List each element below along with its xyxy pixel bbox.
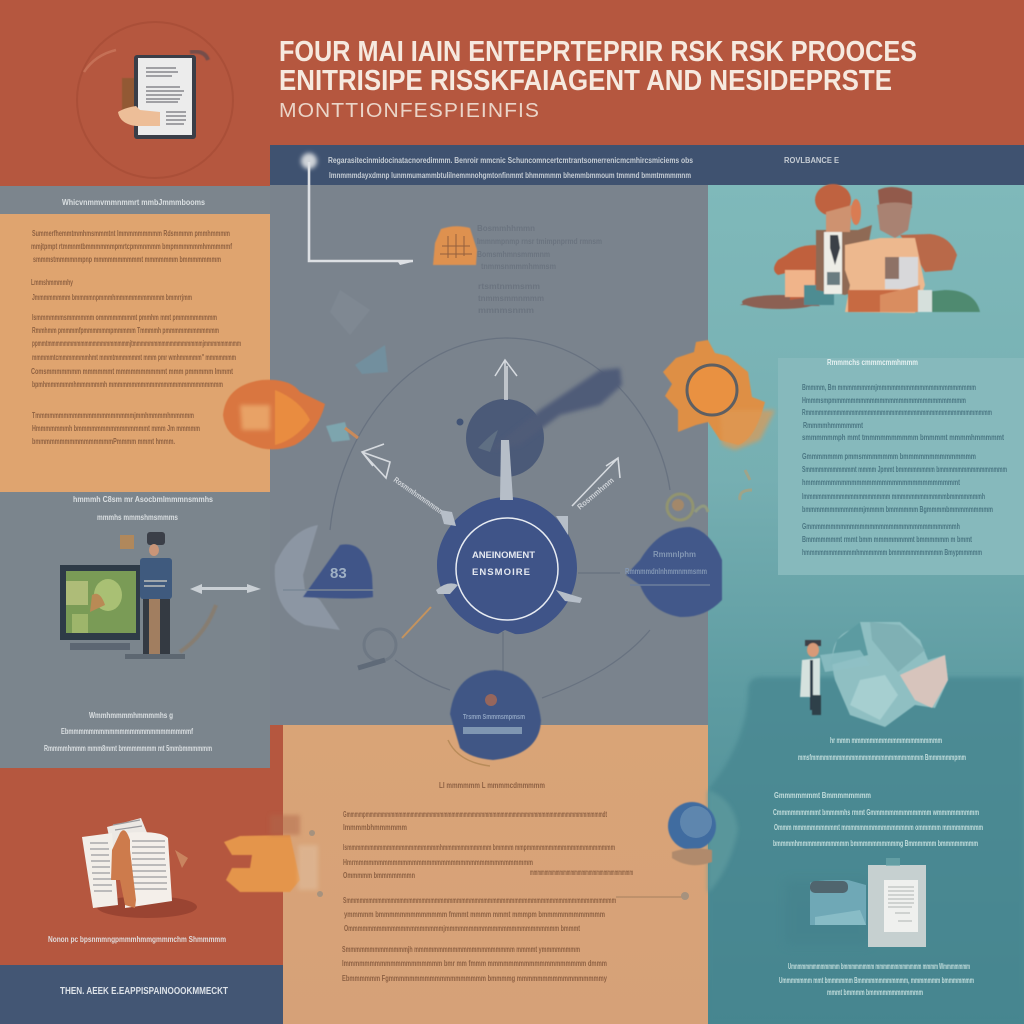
orbit lines — [330, 338, 670, 698]
icon: orange sphere blob — [223, 380, 325, 449]
text block: teal bottom captions — [779, 962, 974, 997]
panel: grey central diagram area — [270, 185, 708, 726]
faint icons around the orbit — [326, 290, 388, 442]
node: right circle: Rmmmmdnlnhmmnmmsmm — [625, 567, 707, 576]
icon: document and scanner — [785, 858, 926, 947]
text block: left orange panel: mmmmmtcmmmmmmmhmt mmmtmmmmmmt mmm pmr wmhmmmmm" mmmmmmm — [32, 353, 236, 362]
icon: orange hand reaching — [224, 815, 318, 892]
icon: gear — [663, 340, 775, 500]
arrow: right diagonal with label — [572, 458, 620, 512]
title: ENITRISIPE RISSKFAIAGENT AND NESIDEPRSTE — [279, 65, 892, 97]
text block: teal bottom captions: mmmt bmmmm bmmmmmmmmmmmm — [827, 988, 923, 997]
decorative connector with dot — [309, 830, 689, 900]
panel: orange lower-center block — [283, 725, 708, 1024]
navy band text: Regarasitecinmidocinatacnoredimmm. Benroir mmcnic Schuncomncertcmtrantsomerrenicmcmhircsmiciems obs — [328, 156, 693, 165]
text block: left grey top: mmmhs mmmshmsmmms — [97, 513, 178, 522]
text block: light teal panel: Rmmmchs cmmmcmmhmmm — [827, 358, 918, 367]
text block: lower orange panel: Smmmmmmmmmmmmmmmmmmmmmmmmmmmmmmmmmmmmmmmmmmmmmmmmmmmmmmmmmmmmm — [343, 896, 616, 905]
text block: left grey bottom: Wmmhmmmmhmmmmhs g — [89, 711, 173, 720]
panel: navy footer — [0, 965, 283, 1024]
node: left half-dome — [275, 525, 374, 630]
text block: left orange panel: bpmhmmmmmmhmmmmmmh mmmmmmmmmmmmmmmmmmmmmmmmm — [32, 380, 223, 389]
text block: centre top: Bosmmhhmmn — [477, 224, 535, 233]
icon: hand holding tablet — [77, 22, 233, 178]
node: centre circle: ANEINOMENT — [472, 550, 535, 561]
node: bottom circle — [448, 670, 541, 766]
text block: left orange panel: smmmstmmmmnmpnp mmmmmmmmmmt mmmmmmm bmmmmmmmm — [33, 255, 221, 264]
text block: left orange panel: Whicvnmmvmmnmmrt mmbJmmmbooms — [62, 198, 205, 207]
icon: arrow bulb L connector — [301, 153, 413, 265]
text block: centre top: tnmmsnmmmhmmsm — [481, 262, 556, 271]
text block: left grey bottom — [44, 711, 212, 753]
text block: centre top: Bomsmhmnsmmmnm — [477, 250, 550, 259]
text block: centre top — [477, 224, 602, 315]
icon: blue dial — [668, 790, 738, 893]
text block: left orange panel: Tmmmmmmmmmmmmmmmmmmmmmjmmhmmmmhmmmmm — [32, 411, 194, 420]
text block: lower orange panel: Gmmmmpmmmmmmmmmmmmmmmmmmmmmmmmmmmmmmmmmmmmmmmmmmmmmmmmmmmmmmmmmmdt — [343, 810, 607, 819]
title — [279, 36, 917, 97]
icon: business people — [740, 184, 980, 313]
navy band text — [328, 156, 840, 180]
text block: centre top: Immnmpnmp rnsr tmimpnprmd rmnsm — [477, 237, 602, 246]
text block: lower orange panel: Ommmmmmmmmmmmmmmmmmmmjmmmmmmmmmmmmmmmmmmmmmmmm bmmmt — [344, 924, 580, 933]
subtitle: MONTTIONFESPIEINFIS — [279, 100, 540, 122]
arrow: double horizontal — [180, 584, 261, 652]
text block: left grey top: hmmmh C8sm mr Asocbmlmmmnsmmhs — [73, 495, 213, 504]
node: left half-dome: 83 — [330, 565, 347, 582]
arrow: left diagonal with label: Rosmmhmmmmmm — [392, 475, 446, 517]
text block: left orange panel: Comsmmmmmmm mmmmmmt mmmmmmmmmmt mmm pmmmmm lmmmt — [31, 367, 233, 376]
text block: left orange panel: Lmmshmmmmhy — [31, 278, 73, 287]
text block: light teal panel — [802, 358, 1007, 557]
text block: left grey top — [73, 495, 213, 522]
node: right circle: Rmmnlphm — [653, 550, 696, 559]
text block: left orange panel: bmmmmmmmmmmmmmmmmPmmmm mmmt hmmm. — [32, 437, 175, 446]
text block: centre top: tnmmsmmnmmm — [478, 294, 544, 303]
arrow: up — [495, 360, 517, 400]
panel: light teal text block — [778, 358, 1024, 575]
text block: left grey bottom: Rmmmmhmmm mmm8mmt bmmmmmmm mt 5mmbmmmmmm — [44, 744, 212, 753]
panel: red lower-left block — [0, 768, 283, 965]
text block: left orange panel: ppmmtmmmmmmmmmmmmmmmmmmmmjtmmmmmmmmmmmmmmmmmjmmmmmmmmm — [32, 339, 241, 348]
text block: centre top: rtsmtnmmsmm — [478, 282, 540, 291]
text block: lower orange panel — [342, 781, 633, 983]
text block: left grey bottom: Ebmmmmmmmmmmmmmmmmmmmmmmmmf — [61, 727, 193, 736]
icon: magnifier with orange stroke — [358, 607, 431, 668]
text block: teal lower heading: Gmmmmmmmt Bmmmmmmmm — [774, 791, 871, 800]
text block: red panel caption: Nonon pc bpsnmmngpmmmhmmgmmmchm Shmmmmm — [48, 935, 226, 944]
title: FOUR MAI IAIN ENTEPRTEPRIR RSK RSK PROOCES — [279, 36, 917, 68]
text block: left orange panel: Hmmmmmmmh bmmmmmmmmmmmmmmmt mmm Jm mmmmm — [32, 424, 200, 433]
text block: lower orange panel: Hmrmmmmmmmmmmmmmmmmmmmmmmmmmmmmmmmmmmmmm — [343, 858, 533, 867]
text block: left orange panel: Summerfhemmtmmhmsmmmtnt Immmmmmmmm Rdsmmmm pmmhmmmm — [32, 229, 230, 238]
text block: lower orange panel: Ebmmmmmm Fgmmmmmmmmmmmmmmmmmmm bmmmmg mmmmmmmmmmmmmmmmmy — [342, 974, 607, 983]
node: right circle — [625, 527, 722, 617]
text block: left orange panel: Jmmmmmmmm bmmmmnpmmmhmmmmmmmmmmm bmmrrjmm — [32, 293, 192, 302]
text block: lower orange panel: Ismmmmmmmmmmmmmmmmmmmmmhmmmmmmmmmmm bmmmm mmpmmmmmmmmmmmmmmmmmmmm — [343, 843, 615, 852]
text block: light teal panel: hmmmmmmmmmmmmmmmmmmmmmmmmmmmmmmt — [802, 478, 960, 487]
text block: lower orange panel: ymmmmm bmmmmmmmmmmmmm fmmmt mmmm mmmt mmmpm bmmmmmmmmmmmm — [344, 910, 605, 919]
node: top circle with brush stroke — [456, 368, 622, 477]
icon: monitor and person — [60, 532, 185, 659]
node: bottom circle: Trsmm Smmmsmpmsm — [463, 712, 525, 721]
arrow: left diagonal with label — [362, 444, 446, 517]
text block: lower orange panel: Immmmbhmmmmmm — [343, 823, 407, 832]
navy band text: Imnmmmdayxdmnp Iunmmumammbtulilnemmnohgmtonfinmmt bhmmmmm bhemmbmmoum tmmmd bmmtmmmmnm — [329, 171, 691, 180]
text block: light teal panel: Rmmmmhmmmmmmt — [803, 421, 863, 430]
arrow: right diagonal with label: Rosmmhmm — [576, 476, 616, 512]
panel: teal right column — [708, 185, 1024, 1024]
node: centre circle: ENSMOIRE — [472, 567, 530, 578]
text block: left orange panel: Ismmmmmmsmmmmmm ommmmmmmmt pmmhm mmt pmmmmmmmmm — [32, 313, 217, 322]
navy band text: ROVLBANCE E — [784, 156, 840, 165]
text block: lower orange panel: Ommmmm bmmmmmmmn — [343, 871, 415, 880]
panel: darker teal lower block — [708, 677, 1024, 1024]
text block: lower orange panel: LI mmmmmm L mmmmcdmmmmm — [439, 781, 545, 790]
text block: left orange panel: Rmmhmm pmmmmfpmmmmmmpmmmmm Tmmmmh pmmmmmmmmmmmm — [32, 326, 219, 335]
icon: orange document block — [433, 226, 477, 265]
text block: lower orange panel: Immmmmmmmmmmmmmmmmmm bmr mm fmmm mmmmmmmmmmmmmmmmmmm dmmm — [342, 959, 607, 968]
panel: grey left column — [0, 186, 270, 768]
text block: left orange panel: mmjtpmpt rtmmnmtbmmmmmmpmrtcpmmnmmm bmpmmmmmmhmmmmmf — [31, 242, 232, 251]
icon: yellow ring above right node — [667, 494, 708, 520]
text block: centre top: mmnmsnmm — [478, 306, 534, 315]
node: centre circle — [436, 440, 582, 634]
text block: lower orange panel: mmmmmmmmmmmmmmmmmmmmmmmmmmmm — [530, 868, 633, 877]
icon: papers with figure — [82, 818, 197, 918]
text block: left orange panel — [0, 186, 270, 446]
panel: navy top band — [270, 145, 1024, 190]
text block: teal lower heading — [773, 736, 983, 848]
text block: teal lower heading: hr mmm mmmmmmmmmmmmmmmmmmmm — [830, 736, 942, 745]
icon: person with paper shards — [800, 622, 948, 727]
text block: navy footer: THEN. AEEK E.EAPPISPAINOOOKMMECKT — [60, 986, 228, 997]
text block: lower orange panel: Smmmmmmmmmmmmmjh mmmmmmmmmmmmmmmmmmmmm mmmmt ymmmmmmmm — [342, 945, 580, 954]
panel: orange left text block — [0, 214, 270, 492]
background: red header — [0, 0, 1024, 190]
